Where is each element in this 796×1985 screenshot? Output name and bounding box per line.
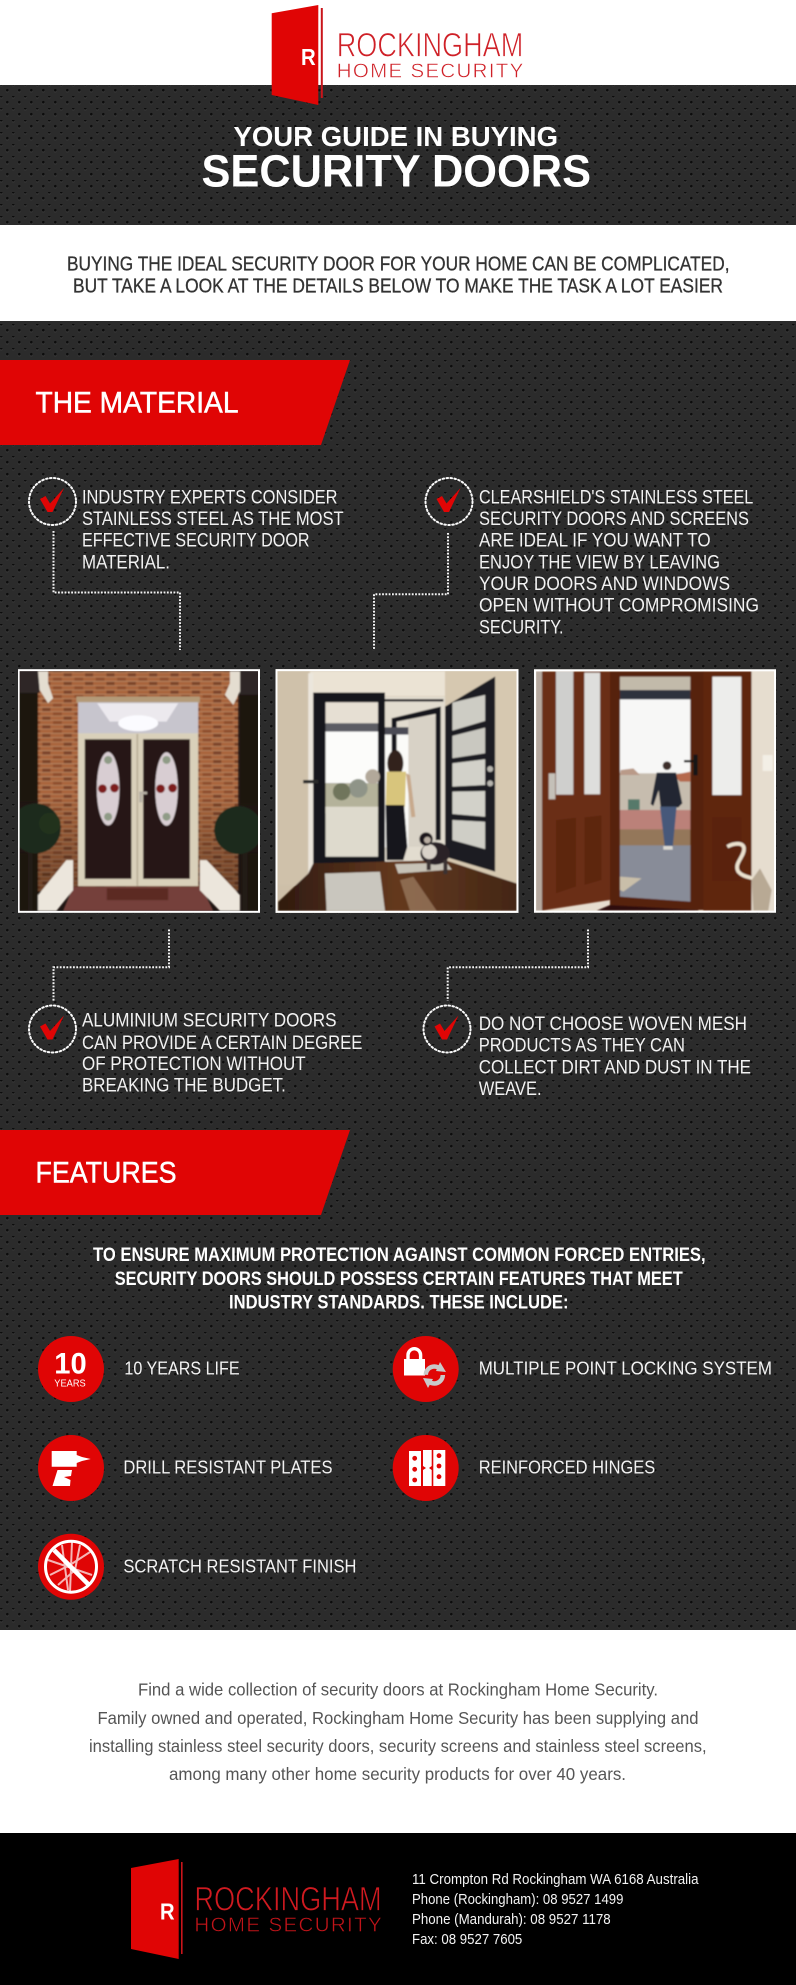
page background: white header bbox=[0, 0, 796, 85]
closing text: installing stainless steel security doors, security screens and stainless steel screens, bbox=[89, 1736, 707, 1756]
title: SECURITY DOORS bbox=[202, 146, 591, 196]
feature: scratch resistant finish bbox=[38, 1534, 356, 1600]
features lead paragraph: TO ENSURE MAXIMUM PROTECTION AGAINST COMMON FORCED ENTRIES, bbox=[93, 1244, 706, 1266]
material point 4: WEAVE. bbox=[479, 1079, 542, 1100]
material point 2: CLEARSHIELD'S STAINLESS STEEL bbox=[479, 487, 753, 508]
logo: Rockingham Home Security (top) bbox=[272, 5, 524, 105]
banner: features bbox=[0, 1130, 350, 1215]
intro panel bbox=[0, 225, 796, 321]
material point 3 bbox=[29, 1006, 362, 1097]
material point 4: COLLECT DIRT AND DUST IN THE bbox=[479, 1057, 751, 1078]
contact details: Fax: 08 9527 7605 bbox=[412, 1931, 522, 1948]
material point 1: MATERIAL. bbox=[82, 552, 170, 573]
material point 2: ARE IDEAL IF YOU WANT TO bbox=[479, 531, 711, 552]
material point 2 bbox=[426, 478, 759, 638]
material point 1: EFFECTIVE SECURITY DOOR bbox=[82, 531, 310, 552]
material point 2: OPEN WITHOUT COMPROMISING bbox=[479, 596, 759, 617]
contact details: Phone (Rockingham): 08 9527 1499 bbox=[412, 1891, 623, 1908]
feature: scratch resistant finish: SCRATCH RESISTANT FINISH bbox=[123, 1557, 356, 1577]
features lead paragraph: INDUSTRY STANDARDS. THESE INCLUDE: bbox=[229, 1292, 568, 1314]
feature: reinforced hinges bbox=[393, 1435, 655, 1501]
closing text: Find a wide collection of security doors at Rockingham Home Security. bbox=[138, 1680, 658, 1700]
logo: Rockingham Home Security (footer): ROCKINGHAM bbox=[194, 1881, 382, 1919]
material point 2: ENJOY THE VIEW BY LEAVING bbox=[479, 552, 720, 573]
logo: Rockingham Home Security (top): ROCKINGHAM bbox=[337, 27, 523, 65]
features lead paragraph bbox=[93, 1244, 706, 1314]
logo: Rockingham Home Security (footer) bbox=[131, 1859, 382, 1959]
logo: Rockingham Home Security (top): R bbox=[301, 44, 316, 70]
material point 2: YOUR DOORS AND WINDOWS bbox=[479, 574, 730, 595]
material point 3: BREAKING THE BUDGET. bbox=[82, 1076, 286, 1097]
feature: 10 years life: 10 bbox=[54, 1347, 87, 1380]
feature: 10 years life bbox=[38, 1336, 240, 1402]
contact details bbox=[412, 1871, 699, 1948]
connector: door photo to point 4 bbox=[448, 930, 588, 1001]
feature: drill resistant plates bbox=[38, 1435, 332, 1501]
intro text bbox=[67, 254, 730, 298]
material point 3: ALUMINIUM SECURITY DOORS bbox=[82, 1011, 336, 1032]
features lead paragraph: SECURITY DOORS SHOULD POSSESS CERTAIN FEATURES THAT MEET bbox=[115, 1268, 683, 1290]
material point 4: DO NOT CHOOSE WOVEN MESH bbox=[479, 1014, 747, 1035]
material point 3: CAN PROVIDE A CERTAIN DEGREE bbox=[82, 1033, 362, 1054]
material point 4: PRODUCTS AS THEY CAN bbox=[479, 1036, 685, 1057]
feature: drill resistant plates: DRILL RESISTANT PLATES bbox=[123, 1457, 333, 1477]
material point 2: SECURITY DOORS AND SCREENS bbox=[479, 509, 749, 530]
material point 1: STAINLESS STEEL AS THE MOST bbox=[82, 509, 344, 530]
material point 1: INDUSTRY EXPERTS CONSIDER bbox=[82, 487, 338, 508]
connector: point 1 to door photo bbox=[54, 531, 180, 650]
feature: multiple point locking system bbox=[393, 1336, 772, 1402]
closing text bbox=[89, 1680, 707, 1784]
logo: Rockingham Home Security (footer): R bbox=[160, 1898, 175, 1924]
material point 3: OF PROTECTION WITHOUT bbox=[82, 1054, 306, 1075]
closing text: Family owned and operated, Rockingham Home Security has been supplying and bbox=[98, 1708, 698, 1728]
material point 4 bbox=[424, 1006, 751, 1100]
photo: man walking out through brown door bbox=[534, 669, 776, 913]
feature: reinforced hinges: REINFORCED HINGES bbox=[479, 1457, 655, 1477]
feature: 10 years life: 10 YEARS LIFE bbox=[124, 1358, 240, 1378]
main panel: perforated dark background bbox=[0, 321, 796, 1630]
material point 1 bbox=[29, 478, 344, 573]
feature: 10 years life: YEARS bbox=[54, 1378, 86, 1390]
logo: Rockingham Home Security (footer): HOME SECURITY bbox=[194, 1914, 382, 1937]
banner: the material: THE MATERIAL bbox=[36, 387, 238, 420]
banner: features: FEATURES bbox=[36, 1157, 176, 1190]
closing panel bbox=[0, 1630, 796, 1833]
photo: woman and dog at black glass door bbox=[276, 669, 518, 913]
hero panel: perforated dark band bbox=[0, 85, 796, 225]
footer panel bbox=[0, 1833, 796, 1985]
connector: point 2 to door photo bbox=[374, 533, 448, 650]
connector: door photo to point 3 bbox=[54, 930, 169, 1001]
photo: double door with brick entry bbox=[18, 669, 260, 913]
material point 2: SECURITY. bbox=[479, 617, 564, 638]
banner: the material bbox=[0, 360, 350, 445]
logo: Rockingham Home Security (top): HOME SECURITY bbox=[337, 59, 524, 82]
contact details: 11 Crompton Rd Rockingham WA 6168 Australia bbox=[412, 1871, 699, 1888]
feature: multiple point locking system: MULTIPLE POINT LOCKING SYSTEM bbox=[479, 1358, 772, 1378]
title: YOUR GUIDE IN BUYING bbox=[234, 121, 558, 152]
contact details: Phone (Mandurah): 08 9527 1178 bbox=[412, 1911, 611, 1928]
title bbox=[202, 121, 591, 196]
closing text: among many other home security products for over 40 years. bbox=[169, 1764, 626, 1784]
